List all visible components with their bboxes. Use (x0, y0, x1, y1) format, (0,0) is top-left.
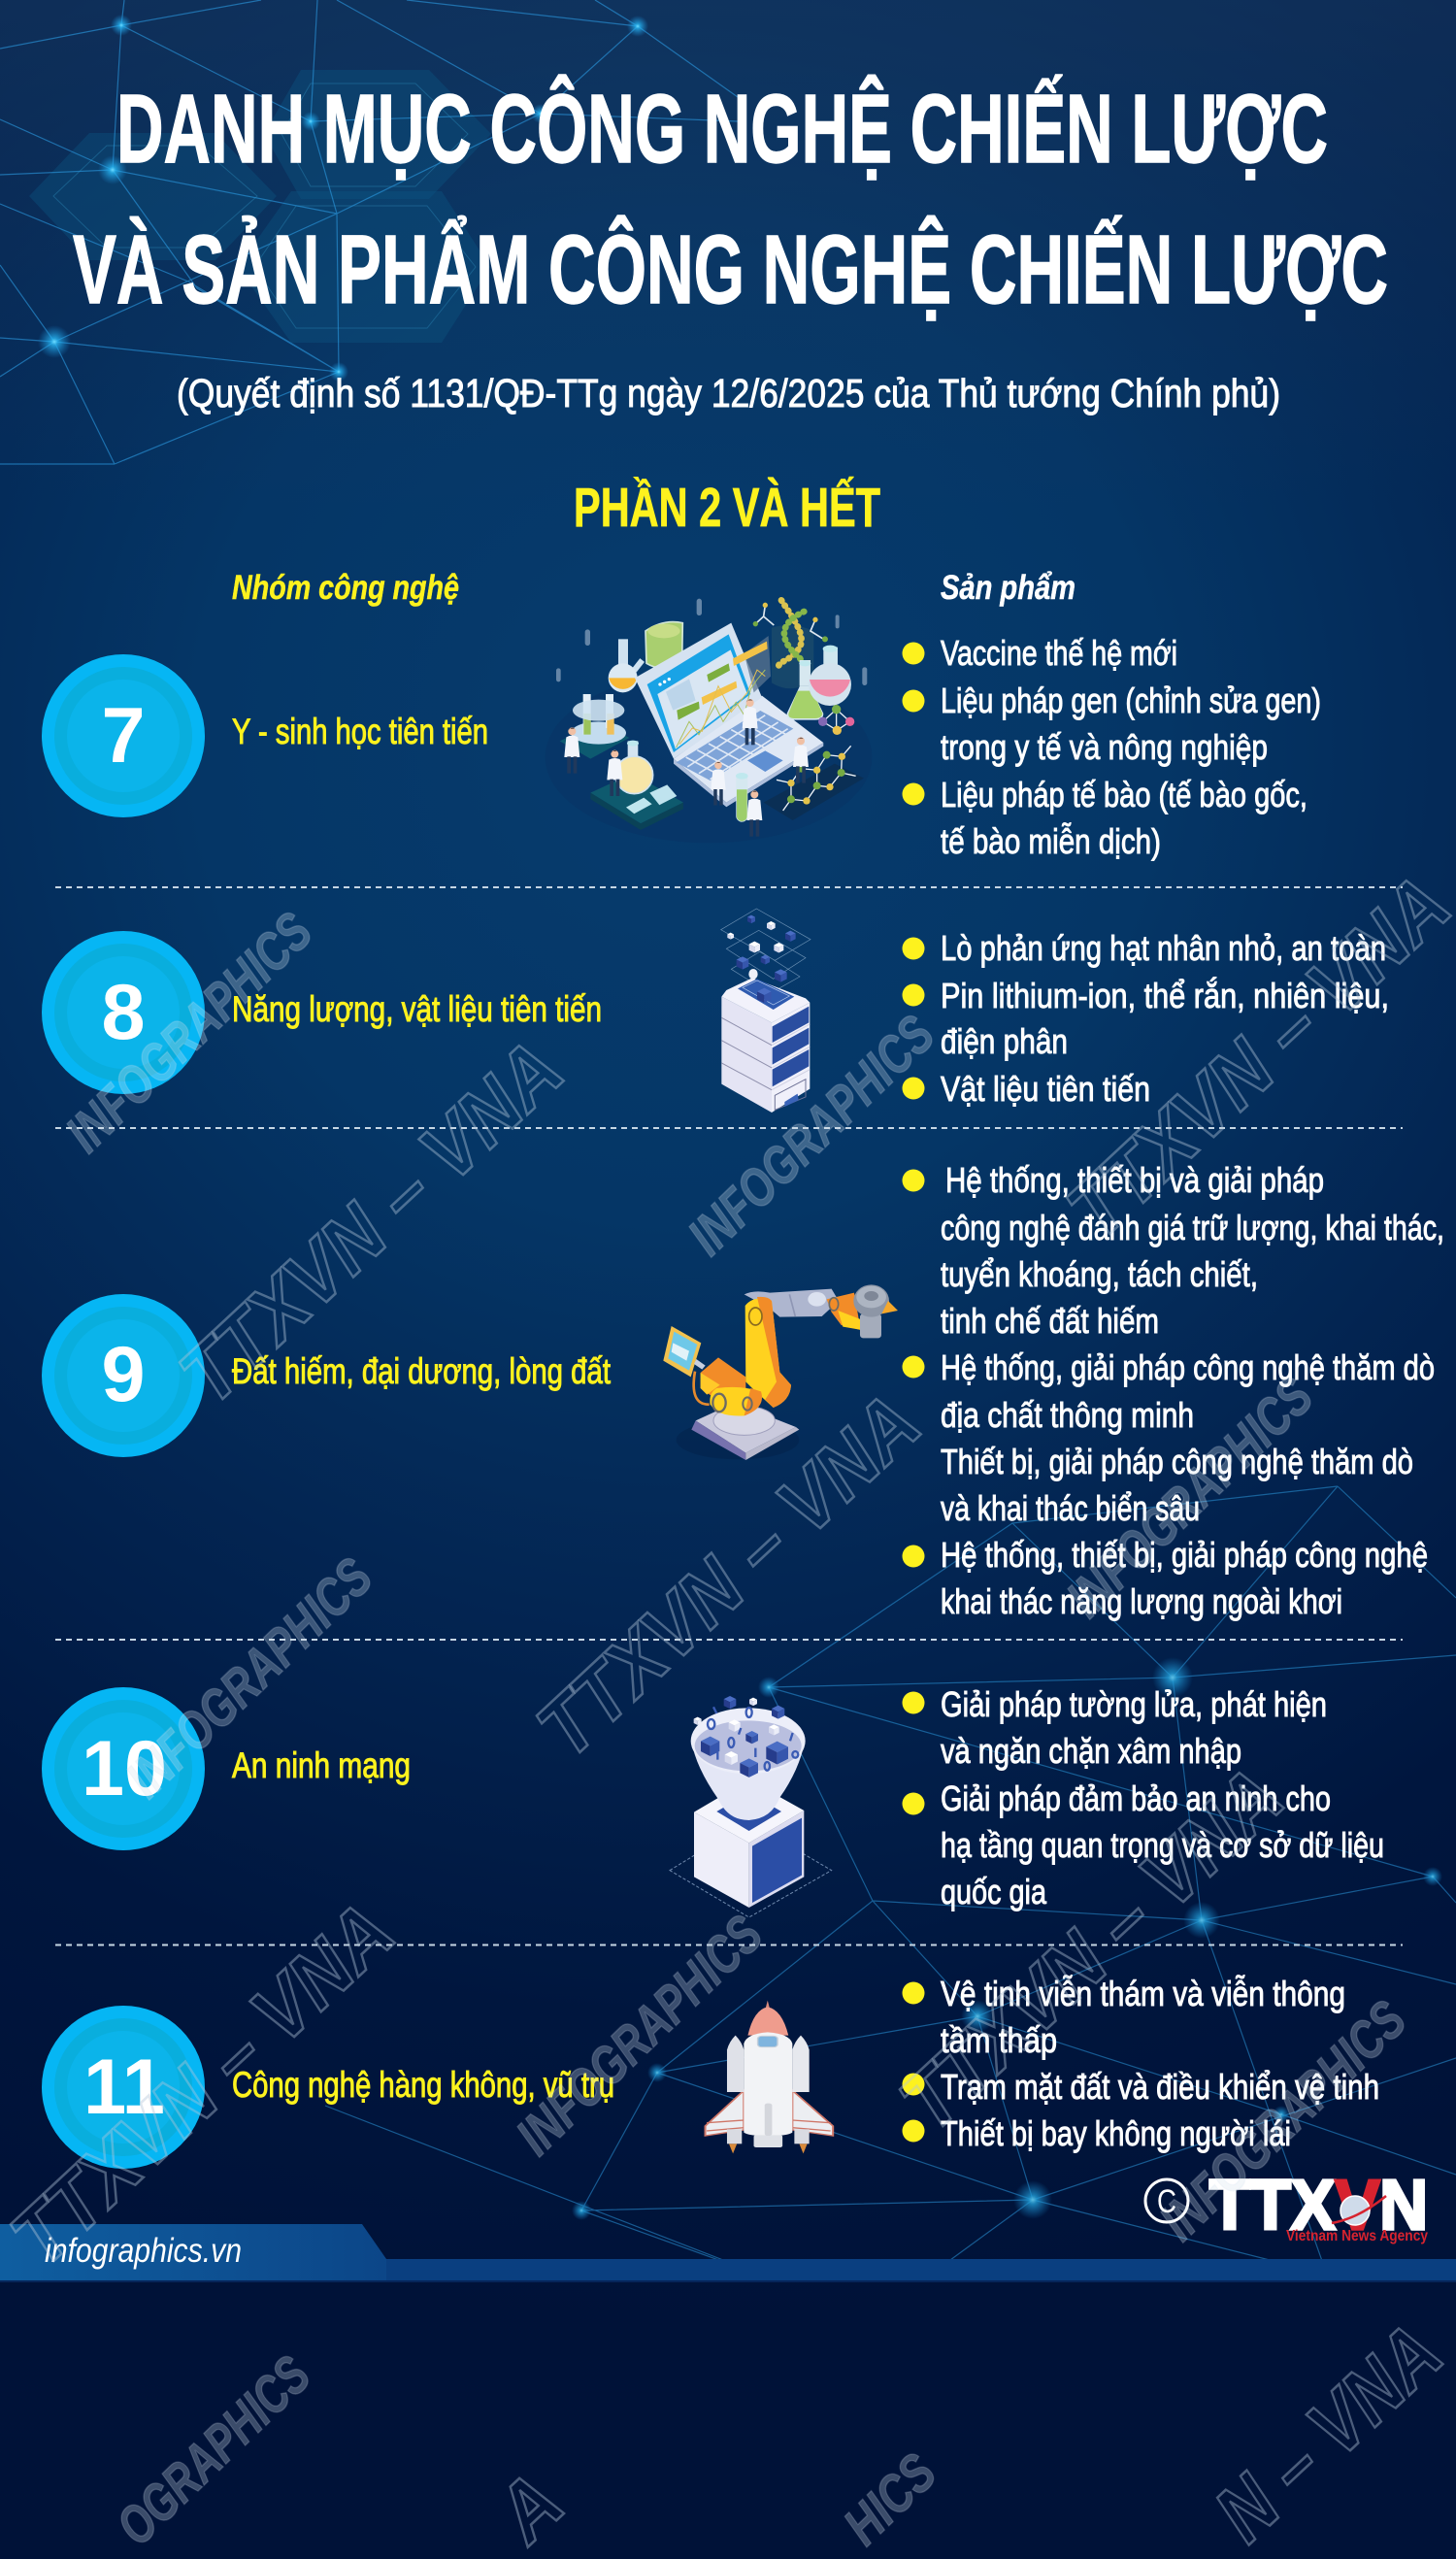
product list: tầm thấp (941, 2020, 1057, 2060)
column heading: technology group: Nhóm công nghệ (232, 569, 459, 607)
number badge 9: 9 (101, 1331, 146, 1418)
watermarks: INFOGRAPHICS (1055, 1365, 1324, 1629)
watermarks: TTXVN – VNA (0, 1885, 411, 2283)
number badge 7 (42, 654, 205, 817)
footer website text: infographics.vn (45, 2232, 242, 2270)
watermarks: INFOGRAPHICS (505, 1903, 774, 2167)
product list: Liệu pháp tế bào (tế bào gốc, (941, 775, 1307, 814)
product list: và khai thác biển sâu (941, 1488, 1200, 1528)
product list: quốc gia (941, 1872, 1047, 1911)
title (73, 75, 1388, 324)
product list: tế bào miễn dịch) (941, 821, 1161, 861)
watermarks: TTXVN – VNA (882, 1750, 1300, 2148)
group label: Y - sinh học tiên tiến (232, 712, 488, 751)
product list: tinh chế đất hiếm (941, 1301, 1159, 1341)
watermarks: TTXVN – VNA (519, 1377, 937, 1775)
product list: Liệu pháp gen (chỉnh sửa gen) (941, 681, 1321, 720)
watermarks: INFOGRAPHICS (115, 1545, 383, 1810)
number badge 10 (42, 1687, 205, 1850)
row 7 (42, 599, 1321, 861)
product list: tuyển khoáng, tách chiết, (941, 1254, 1258, 1294)
product list: Thiết bị bay không người lái (941, 2113, 1291, 2153)
part heading: PHẦN 2 VÀ HẾT (574, 476, 880, 539)
network lines top-left (0, 0, 738, 464)
product list: Vệ tinh viễn thám và viễn thông (941, 1974, 1345, 2013)
logo: TTXVN copyright: TTXVN (1209, 2167, 1428, 2244)
row 10 (42, 1684, 1384, 1917)
icon: robot arm (663, 1284, 898, 1460)
product list: Hệ thống, thiết bị và giải pháp (945, 1160, 1324, 1200)
logo: TTXVN copyright: C (1157, 2183, 1176, 2220)
icon: data funnel and security box (670, 1696, 832, 1917)
group label: Năng lượng, vật liệu tiên tiến (232, 989, 602, 1029)
product list: điện phân (941, 1021, 1068, 1061)
group label: Đất hiếm, đại dương, lòng đất (232, 1351, 612, 1391)
number badge 7: 7 (101, 692, 146, 780)
row 9 (42, 1160, 1444, 1621)
watermarks (0, 858, 1456, 2559)
group label: Công nghệ hàng không, vũ trụ (232, 2065, 614, 2105)
product list: khai thác năng lượng ngoài khơi (941, 1581, 1342, 1621)
product list: Vật liệu tiên tiến (941, 1069, 1150, 1109)
watermarks: HICS (832, 2442, 947, 2556)
product list: Giải pháp tường lửa, phát hiện (941, 1684, 1327, 1724)
number badge 11 (42, 2006, 205, 2169)
product list (903, 1974, 1379, 2153)
column heading: products: Sản phẩm (941, 569, 1075, 607)
product list: Giải pháp đảm bảo an ninh cho (941, 1778, 1331, 1818)
row 11 (42, 1974, 1379, 2169)
logo: TTXVN copyright: Vietnam News Agency (1286, 2228, 1428, 2244)
product list (903, 1684, 1384, 1911)
subtitle: (Quyết định số 1131/QĐ-TTg ngày 12/6/2025 của Thủ tướng Chính phủ) (177, 371, 1280, 415)
product list (903, 633, 1321, 861)
footer band (0, 2224, 1456, 2282)
watermarks: A (478, 2456, 579, 2559)
group label: An ninh mạng (232, 1745, 411, 1785)
icon: energy storage tower (721, 909, 811, 1113)
row 8 (42, 909, 1389, 1113)
number badge 8: 8 (101, 969, 146, 1056)
number badge 8 (42, 931, 205, 1094)
icon: biotech laboratory laptop (546, 599, 872, 843)
product list (903, 1160, 1444, 1621)
number badge 10: 10 (82, 1725, 167, 1812)
watermarks: OGRAPHICS (105, 2343, 321, 2556)
watermarks: INFOGRAPHICS (54, 900, 323, 1164)
watermarks: INFOGRAPHICS (677, 1003, 945, 1267)
product list (903, 928, 1389, 1109)
product list: địa chất thông minh (941, 1395, 1194, 1435)
product list: và ngăn chặn xâm nhập (941, 1731, 1241, 1771)
icon: space shuttle rocket (706, 2001, 833, 2153)
watermarks: TTXVN – VNA (162, 1023, 579, 1421)
network lines bottom-right (325, 1486, 1456, 2278)
product list: Vaccine thế hệ mới (941, 633, 1177, 673)
number badge 9 (42, 1294, 205, 1457)
decorative hexagons top-left (29, 70, 491, 343)
number badge 11: 11 (83, 2044, 165, 2131)
product list: trong y tế và nông nghiệp (941, 727, 1268, 767)
